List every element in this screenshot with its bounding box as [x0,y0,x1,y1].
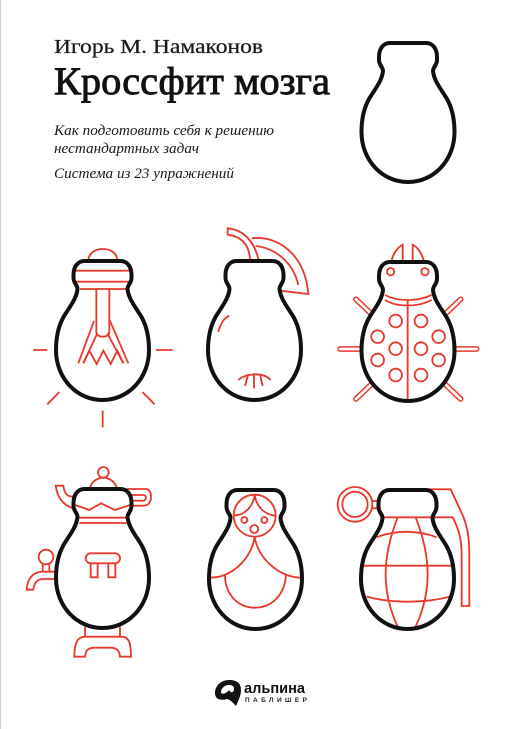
icon: ladybug [340,245,477,401]
subtitle: нестандартных задач [54,141,199,157]
icon: light bulb [33,249,173,427]
logo subtitle: ПАБЛИШЕР [245,697,308,704]
subtitle: Система из 23 упражнений [54,166,235,182]
title: Кроссфит мозга [54,60,330,103]
icon: grenade [338,487,469,629]
subtitle [53,123,274,182]
icon: empty bulb outline [362,43,454,182]
icon: samovar [27,467,151,657]
author name: Игорь М. Намаконов [54,36,263,58]
logo name: альпина [244,680,306,697]
publisher logo [215,680,308,706]
logo mark [215,680,241,706]
subtitle: Как подготовить себя к решению [53,123,274,139]
icon: matryoshka doll [209,490,302,629]
icon: pear [208,228,308,400]
